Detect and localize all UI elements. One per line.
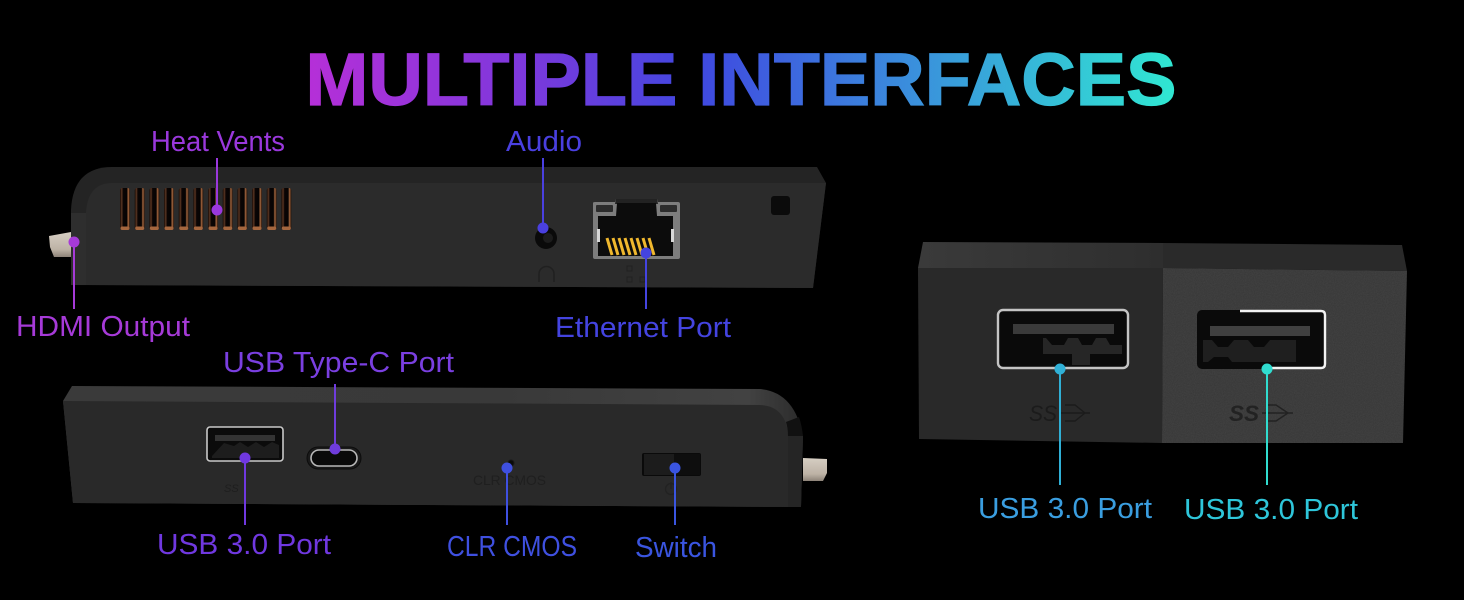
- left strip: [71, 213, 86, 285]
- callout: USB 3.0 Port (bottom device): [157, 452, 331, 561]
- left top bevel: [918, 242, 1163, 268]
- callout: Heat Vents: [151, 126, 285, 216]
- right USB 3.0 port: SS: [1229, 401, 1259, 426]
- callout: Audio: [506, 126, 582, 234]
- right USB 3.0 port: [1197, 310, 1326, 426]
- CMOS reset hole and print: [473, 460, 546, 488]
- callout: Audio: Audio: [506, 126, 582, 158]
- front face: [63, 401, 788, 507]
- icon: HDMI connector: [49, 232, 71, 257]
- front face: [86, 183, 826, 288]
- callout: USB 3.0 Port (right on end view): [1184, 364, 1358, 526]
- right strip: [788, 436, 803, 507]
- callout: USB Type-C Port: [223, 347, 454, 454]
- audio jack: [535, 227, 557, 282]
- callout: CLR CMOS: CLR CMOS: [447, 531, 577, 563]
- icon: HDMI connector: [803, 458, 827, 481]
- left USB 3.0 port: SS: [1029, 401, 1057, 426]
- callout: Ethernet Port: [555, 248, 731, 344]
- callout: Heat Vents: Heat Vents: [151, 126, 285, 158]
- panel: right device end view: [918, 242, 1407, 443]
- USB 3.0 port: SS: [224, 483, 239, 495]
- callout: USB Type-C Port: USB Type-C Port: [223, 347, 454, 379]
- right face: [1162, 268, 1407, 443]
- panel: bottom device side view: [63, 386, 827, 507]
- power switch: [642, 453, 701, 494]
- callout: HDMI Output: [16, 236, 190, 343]
- USB Type-C port: [307, 447, 361, 469]
- callout: Switch: [635, 462, 717, 564]
- USB 3.0 port: [207, 427, 283, 495]
- callout: Ethernet Port: Ethernet Port: [555, 312, 731, 344]
- callout: CLR CMOS: [447, 462, 577, 563]
- left USB 3.0 port: [998, 310, 1128, 426]
- dark corner patch: [786, 417, 803, 436]
- heat vents: [120, 188, 291, 230]
- title: MULTIPLE INTERFACES: [306, 38, 1176, 121]
- callout: HDMI Output: HDMI Output: [16, 311, 190, 343]
- device body: [63, 386, 803, 507]
- callout: USB 3.0 Port (bottom device): USB 3.0 Port: [157, 529, 331, 561]
- small square slot: [771, 196, 790, 215]
- ethernet port: [593, 199, 680, 282]
- device body: [71, 167, 826, 288]
- CMOS reset hole and print: CLR CMOS: [473, 472, 546, 488]
- callout: Switch: Switch: [635, 532, 717, 564]
- panel: top device side view: [49, 167, 826, 288]
- callout: USB 3.0 Port (left on end view): USB 3.0 Port: [978, 493, 1152, 525]
- callout: USB 3.0 Port (right on end view): USB 3.0 Port: [1184, 494, 1358, 526]
- callout: USB 3.0 Port (left on end view): [978, 364, 1152, 525]
- left face: [918, 268, 1163, 443]
- right top bevel: [1163, 243, 1407, 271]
